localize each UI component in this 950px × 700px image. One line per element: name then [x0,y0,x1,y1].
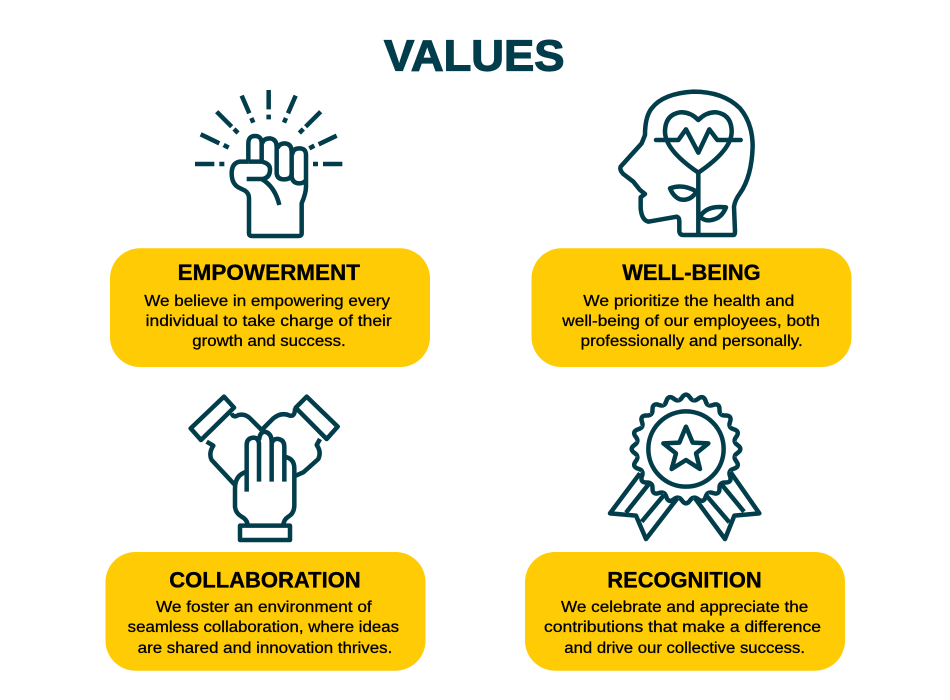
heading: recognition: RECOGNITION [607,567,762,592]
panel: empowerment [110,248,430,367]
title: VALUES [384,32,564,80]
text block: well-being description: well-being of our employees, both [561,313,820,330]
text block: recognition description: and drive our collective success. [564,640,805,657]
text block: recognition description: contributions that make a difference [544,619,821,636]
text block: collaboration description: seamless collaboration, where ideas [128,619,399,636]
panel: recognition [525,552,845,671]
text block: recognition description [544,599,821,657]
text block: empowerment description: individual to take charge of their [146,313,392,330]
text block: collaboration description: We foster an environment of [156,599,372,616]
panel: well-being [532,248,852,367]
text block: empowerment description: growth and success. [192,333,346,350]
panel: collaboration [106,552,426,671]
text block: collaboration description: are shared and innovation thrives. [138,640,392,657]
text block: well-being description: professionally and personally. [581,333,803,350]
icon: head with heart and plant [620,92,753,235]
text block: empowerment description [144,293,392,350]
icon: award rosette with star [610,395,759,539]
icon: three joined hands [191,397,338,540]
text block: empowerment description: We believe in empowering every [144,293,390,310]
text block: collaboration description [128,599,399,657]
text block: well-being description [561,293,820,350]
heading: empowerment: EMPOWERMENT [178,260,361,285]
text block: well-being description: We prioritize the health and [583,293,794,310]
icon: raised fist with rays [195,90,342,236]
heading: collaboration: COLLABORATION [169,567,361,592]
text block: recognition description: We celebrate and appreciate the [561,599,808,616]
heading: well-being: WELL-BEING [622,260,761,285]
